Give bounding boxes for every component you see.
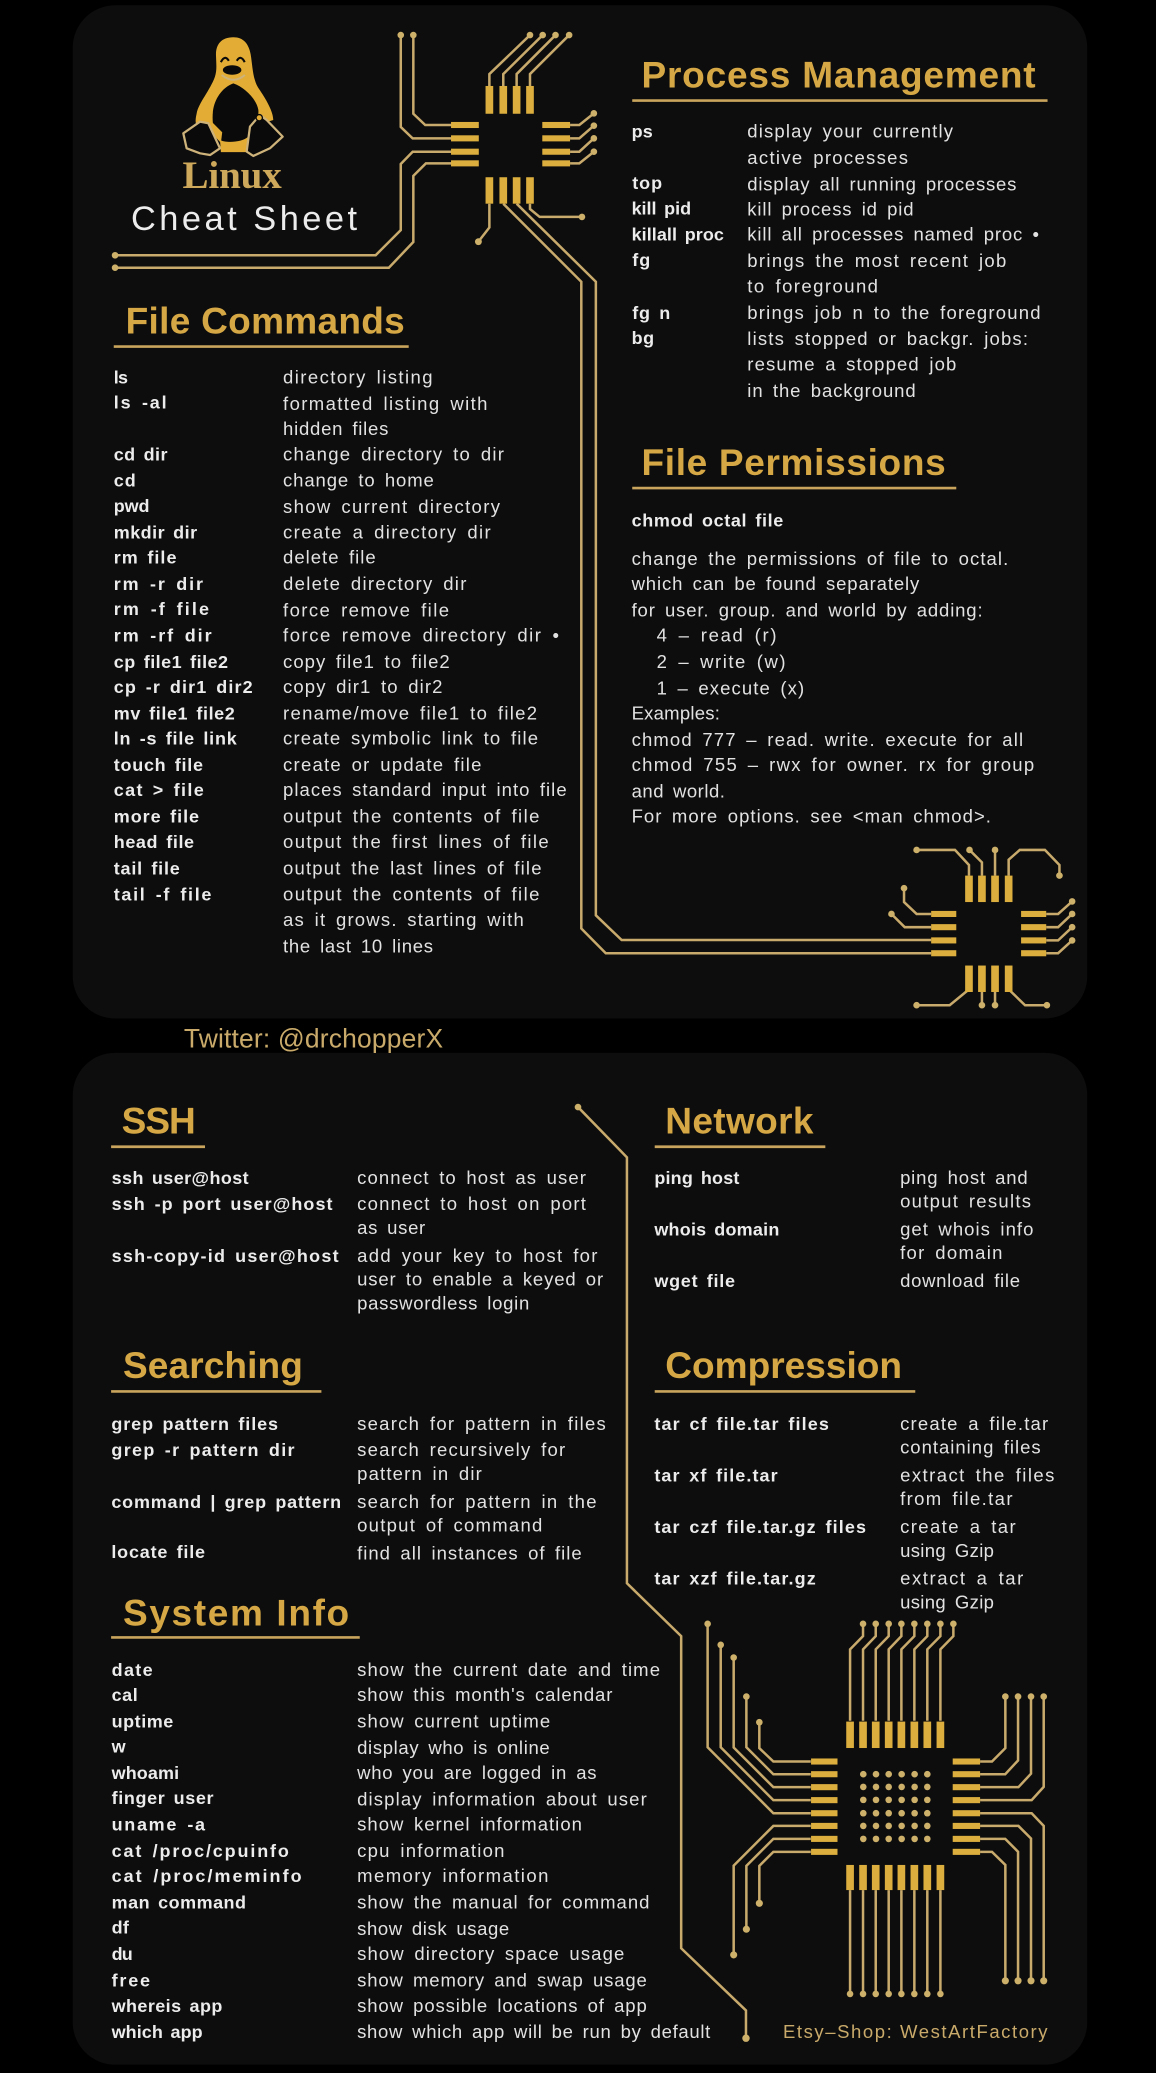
command list: ls -al xyxy=(114,393,167,413)
heading: Network: Network xyxy=(665,1100,814,1142)
compression list: extract the files xyxy=(900,1464,1054,1485)
command list: mkdir dir xyxy=(114,522,197,542)
process list: kill all processes named proc • xyxy=(747,224,1039,245)
title: Cheat Sheet: Cheat Sheet xyxy=(131,200,358,238)
network list: ping host and xyxy=(900,1167,1028,1188)
panel: process management xyxy=(632,53,1048,401)
circuit: large chip xyxy=(704,1621,1047,1997)
permissions text: chmod octal file xyxy=(632,510,783,530)
panel: compression xyxy=(654,1344,1054,1612)
command list: touch file xyxy=(114,755,203,775)
searching list: locate file xyxy=(111,1542,205,1562)
system info list: whoami xyxy=(111,1763,179,1783)
system info list xyxy=(111,1659,710,2042)
command list: force remove directory dir • xyxy=(283,624,559,645)
command list: copy file1 to file2 xyxy=(283,651,450,672)
system info list: show memory and swap usage xyxy=(357,1970,647,1991)
command list: cp -r dir1 dir2 xyxy=(114,677,253,697)
command list: ln -s file link xyxy=(114,729,238,749)
system info list: show this month's calendar xyxy=(357,1684,612,1705)
permissions text: chmod 777 – read. write. execute for all xyxy=(632,729,1023,750)
panel: file permissions xyxy=(631,441,1034,827)
system info list: finger user xyxy=(112,1788,213,1808)
heading: SSH: SSH xyxy=(122,1100,196,1142)
process list: brings the most recent job xyxy=(747,250,1006,271)
command list: tail file xyxy=(114,858,180,878)
permissions text: for user. group. and world by adding: xyxy=(632,599,983,620)
heading: System Info: System Info xyxy=(123,1592,349,1634)
system info list: uptime xyxy=(112,1711,173,1731)
command list: as it grows. starting with xyxy=(283,909,524,930)
network list: get whois info xyxy=(900,1218,1033,1239)
system info list: cal xyxy=(112,1685,138,1705)
command list: copy dir1 to dir2 xyxy=(283,676,442,697)
command list: mv file1 file2 xyxy=(114,704,235,724)
searching list: pattern in dir xyxy=(357,1463,482,1484)
credit: Etsy shop: Etsy–Shop: WestArtFactory xyxy=(783,2021,1048,2042)
heading: File Commands: File Commands xyxy=(126,299,405,341)
searching list: output of command xyxy=(357,1515,542,1536)
network list: download file xyxy=(900,1270,1020,1291)
system info list: who you are logged in as xyxy=(356,1762,597,1783)
system info list: w xyxy=(111,1737,127,1757)
command list: force remove file xyxy=(283,599,449,620)
system info list: show directory space usage xyxy=(357,1943,624,1964)
command list: output the contents of file xyxy=(283,806,539,827)
command list: cd dir xyxy=(114,444,167,464)
panel: searching xyxy=(111,1344,606,1563)
process list: killall proc xyxy=(632,225,724,245)
command list: create a directory dir xyxy=(283,521,491,542)
compression list: create a file.tar xyxy=(900,1413,1048,1434)
system info list: show possible locations of app xyxy=(357,1995,647,2016)
permissions text: and world. xyxy=(632,781,725,802)
system info list: whereis app xyxy=(111,1996,222,2016)
searching list: command | grep pattern xyxy=(111,1492,341,1512)
searching list: grep pattern files xyxy=(111,1414,278,1434)
command list: create symbolic link to file xyxy=(283,728,538,749)
system info list: which app xyxy=(111,2022,203,2042)
system info list: cpu information xyxy=(357,1840,504,1861)
ssh list: connect to host as user xyxy=(357,1167,586,1188)
system info list: free xyxy=(112,1971,150,1991)
panel: SSH xyxy=(111,1100,603,1313)
ssh list: user to enable a keyed or xyxy=(357,1269,603,1290)
command list: cd xyxy=(114,471,136,491)
ssh list: passwordless login xyxy=(357,1292,529,1313)
system info list: show disk usage xyxy=(357,1918,509,1939)
title: Linux: Linux xyxy=(183,154,282,197)
permissions text xyxy=(631,510,1034,827)
process list: top xyxy=(632,173,662,193)
permissions text: 2 – write (w) xyxy=(657,651,786,672)
command list: output the contents of file xyxy=(283,884,539,905)
searching list: search for pattern in the xyxy=(357,1491,597,1512)
compression list: containing files xyxy=(900,1437,1041,1458)
permissions text: Examples: xyxy=(632,703,720,724)
command list: rm -r dir xyxy=(114,574,203,594)
permissions text: which can be found separately xyxy=(631,573,920,594)
circuit: center divider trace xyxy=(578,1107,746,2038)
panel: bottom card xyxy=(73,1053,1087,2065)
command list: tail -f file xyxy=(114,885,211,905)
system info list: show kernel information xyxy=(357,1814,582,1835)
system info list: show current uptime xyxy=(357,1710,550,1731)
command list: change directory to dir xyxy=(283,443,504,464)
command list: rm -f file xyxy=(114,599,209,619)
command list: output the last lines of file xyxy=(283,857,541,878)
command list: cp file1 file2 xyxy=(114,652,228,672)
command list: more file xyxy=(114,807,199,827)
command list xyxy=(114,367,567,956)
process list: in the background xyxy=(747,380,916,401)
system info list: uname -a xyxy=(112,1815,206,1835)
network list: whois domain xyxy=(653,1219,779,1239)
process list: bg xyxy=(632,328,654,348)
compression list: extract a tar xyxy=(900,1568,1023,1589)
compression list: tar czf file.tar.gz files xyxy=(654,1517,866,1537)
compression list: using Gzip xyxy=(900,1591,994,1612)
process list: lists stopped or backgr. jobs: xyxy=(747,328,1028,349)
process list: display your currently xyxy=(747,121,954,142)
system info list: show the manual for command xyxy=(357,1892,649,1913)
process list: kill process id pid xyxy=(747,199,914,220)
permissions text: For more options. see <man chmod>. xyxy=(632,806,991,827)
command list: output the first lines of file xyxy=(283,831,549,852)
command list: pwd xyxy=(114,496,149,516)
icon: Tux penguin xyxy=(183,37,283,156)
permissions text: 4 – read (r) xyxy=(657,624,777,645)
system info list: man command xyxy=(112,1893,246,1913)
command list: rm file xyxy=(114,547,176,567)
searching list: search recursively for xyxy=(357,1439,565,1460)
command list: create or update file xyxy=(283,754,481,775)
compression list: from file.tar xyxy=(900,1488,1012,1509)
process list: kill pid xyxy=(632,198,691,218)
permissions text: 1 – execute (x) xyxy=(657,677,804,698)
process list: active processes xyxy=(747,147,908,168)
system info list: show which app will be run by default xyxy=(357,2021,710,2042)
command list: show current directory xyxy=(283,496,501,517)
system info list: cat /proc/cpuinfo xyxy=(112,1841,289,1861)
icon: trace end dot xyxy=(575,1104,581,1110)
network list: ping host xyxy=(654,1168,739,1188)
compression list: create a tar xyxy=(900,1516,1016,1537)
system info list: display information about user xyxy=(357,1788,647,1809)
credit: Twitter: Twitter: @drchopperX xyxy=(184,1024,443,1054)
command list: formatted listing with xyxy=(283,393,487,414)
command list: ls xyxy=(114,368,128,388)
icon: trace end dot xyxy=(742,2035,750,2042)
ssh list: ssh user@host xyxy=(112,1168,249,1188)
process list: to foreground xyxy=(747,275,878,296)
ssh list: ssh-copy-id user@host xyxy=(112,1246,339,1266)
compression list: tar xf file.tar xyxy=(654,1465,778,1485)
panel: file commands xyxy=(114,299,567,956)
command list: hidden files xyxy=(283,418,388,439)
network list xyxy=(653,1167,1033,1291)
searching list: grep -r pattern dir xyxy=(111,1440,295,1460)
ssh list: add your key to host for xyxy=(357,1245,597,1266)
panel: network xyxy=(653,1100,1033,1291)
panel: top card xyxy=(73,5,1087,1018)
network list: for domain xyxy=(900,1242,1002,1263)
command list: rm -rf dir xyxy=(114,625,212,645)
command list: the last 10 lines xyxy=(283,935,433,956)
command list: head file xyxy=(114,832,194,852)
searching list xyxy=(111,1413,606,1563)
compression list xyxy=(654,1413,1054,1612)
heading: Searching: Searching xyxy=(123,1344,303,1386)
command list: cat > file xyxy=(114,780,204,800)
heading: Process Management: Process Management xyxy=(641,53,1036,95)
compression list: tar cf file.tar files xyxy=(654,1414,829,1434)
ssh list: as user xyxy=(357,1217,425,1238)
ssh list: ssh -p port user@host xyxy=(112,1194,333,1214)
circuit: right lower chip xyxy=(888,847,1075,1009)
compression list: using Gzip xyxy=(900,1540,994,1561)
command list: directory listing xyxy=(283,367,433,388)
process list: ps xyxy=(632,122,653,142)
permissions text: change the permissions of file to octal. xyxy=(632,548,1008,569)
network list: output results xyxy=(900,1191,1031,1212)
system info list: display who is online xyxy=(357,1737,550,1758)
process list: resume a stopped job xyxy=(747,353,956,374)
searching list: find all instances of file xyxy=(357,1542,582,1563)
command list: change to home xyxy=(283,470,434,491)
system info list: memory information xyxy=(357,1865,548,1886)
permissions text: chmod 755 – rwx for owner. rx for group xyxy=(632,754,1034,775)
process list: fg n xyxy=(632,303,670,323)
system info list: cat /proc/meminfo xyxy=(112,1866,302,1886)
process list xyxy=(632,121,1041,401)
circuit: top chip with traces xyxy=(112,32,931,953)
ssh list: connect to host on port xyxy=(357,1193,586,1214)
compression list: tar xzf file.tar.gz xyxy=(654,1569,816,1589)
searching list: search for pattern in files xyxy=(357,1413,606,1434)
process list: display all running processes xyxy=(747,173,1016,194)
panel: system info xyxy=(111,1592,710,2042)
command list: places standard input into file xyxy=(283,779,567,800)
process list: fg xyxy=(632,250,650,270)
ssh list xyxy=(112,1167,603,1313)
command list: rename/move file1 to file2 xyxy=(283,703,537,724)
network list: wget file xyxy=(653,1271,735,1291)
command list: delete file xyxy=(283,546,376,567)
heading: File Permissions: File Permissions xyxy=(641,441,946,483)
system info list: show the current date and time xyxy=(357,1659,660,1680)
heading: Compression: Compression xyxy=(665,1344,902,1386)
command list: delete directory dir xyxy=(283,573,466,594)
system info list: date xyxy=(112,1660,153,1680)
system info list: df xyxy=(112,1918,130,1938)
process list: brings job n to the foreground xyxy=(747,302,1041,323)
system info list: du xyxy=(112,1944,133,1964)
